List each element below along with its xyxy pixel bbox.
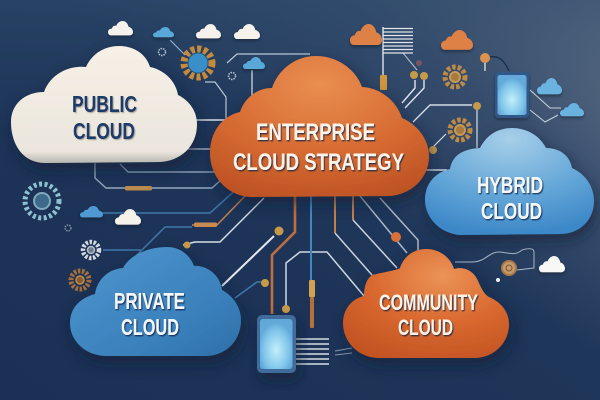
chip: left gold (125, 186, 152, 190)
small cloud: blue 1 (153, 27, 174, 37)
chip: vertical gold bottom (309, 280, 315, 328)
gear: brown lower left (71, 271, 89, 289)
heading: public cloud: PUBLIC (72, 91, 137, 117)
heading: public cloud: CLOUD (73, 118, 135, 144)
small cloud: white 5 (539, 256, 565, 272)
small cloud: orange 1 (350, 24, 382, 45)
cloud: enterprise cloud strategy (210, 56, 429, 197)
circuit chips (125, 53, 500, 328)
stripe block: top (383, 28, 413, 53)
wires: lower left (102, 186, 364, 314)
gear: upper right gold (445, 67, 465, 87)
circuit wires (95, 27, 561, 355)
heading: private cloud (114, 288, 185, 340)
small cloud: white 2 (196, 24, 221, 38)
cloud: private cloud (70, 247, 241, 356)
wires: upper left (95, 40, 310, 188)
heading: hybrid cloud (477, 172, 543, 224)
cloud: hybrid cloud (425, 128, 594, 235)
chip: orange lower left (194, 222, 217, 227)
small cloud: light blue 2 (560, 103, 584, 116)
heading: community cloud: CLOUD (398, 315, 453, 340)
heading: enterprise cloud strategy (233, 119, 404, 176)
chip: upper right gold (380, 75, 387, 90)
gears (25, 48, 516, 289)
gear: small grey (158, 48, 166, 56)
small cloud: white 3 (234, 24, 260, 39)
device: bottom tablet (257, 315, 296, 373)
gear: community right (502, 261, 516, 275)
heading: hybrid cloud: CLOUD (481, 198, 542, 224)
cloud: community cloud (343, 249, 509, 358)
small cloud: orange 2 (441, 30, 473, 50)
heading: private cloud: CLOUD (121, 314, 179, 340)
small clouds (80, 21, 584, 272)
heading: enterprise cloud strategy: ENTERPRISE (256, 119, 375, 146)
cloud: public cloud (11, 46, 197, 163)
small cloud: blue 2 (243, 57, 265, 69)
heading: enterprise cloud strategy: CLOUD STRATEGY (233, 149, 404, 176)
wires: lower right (311, 196, 534, 355)
small cloud: light blue 1 (537, 78, 562, 94)
gear: right gold (450, 120, 470, 140)
stripe block: bottom (296, 339, 329, 364)
small cloud: white 1 (108, 21, 133, 35)
gear: white lower left (83, 242, 99, 258)
heading: private cloud: PRIVATE (114, 288, 185, 314)
device: upper right tablet (495, 72, 529, 118)
gear: small grey lower left (65, 225, 71, 231)
gear: left teal (25, 184, 59, 218)
connector dots (184, 53, 500, 313)
small cloud: blue 3 (80, 206, 103, 217)
heading: public cloud (72, 91, 137, 144)
wires: upper right (383, 27, 561, 170)
heading: community cloud (379, 290, 478, 340)
gear: small grey right (228, 72, 236, 80)
small cloud: white 4 (115, 209, 141, 225)
heading: hybrid cloud: HYBRID (477, 172, 543, 198)
gear: top gold and blue (184, 49, 212, 77)
heading: community cloud: COMMUNITY (379, 290, 478, 315)
